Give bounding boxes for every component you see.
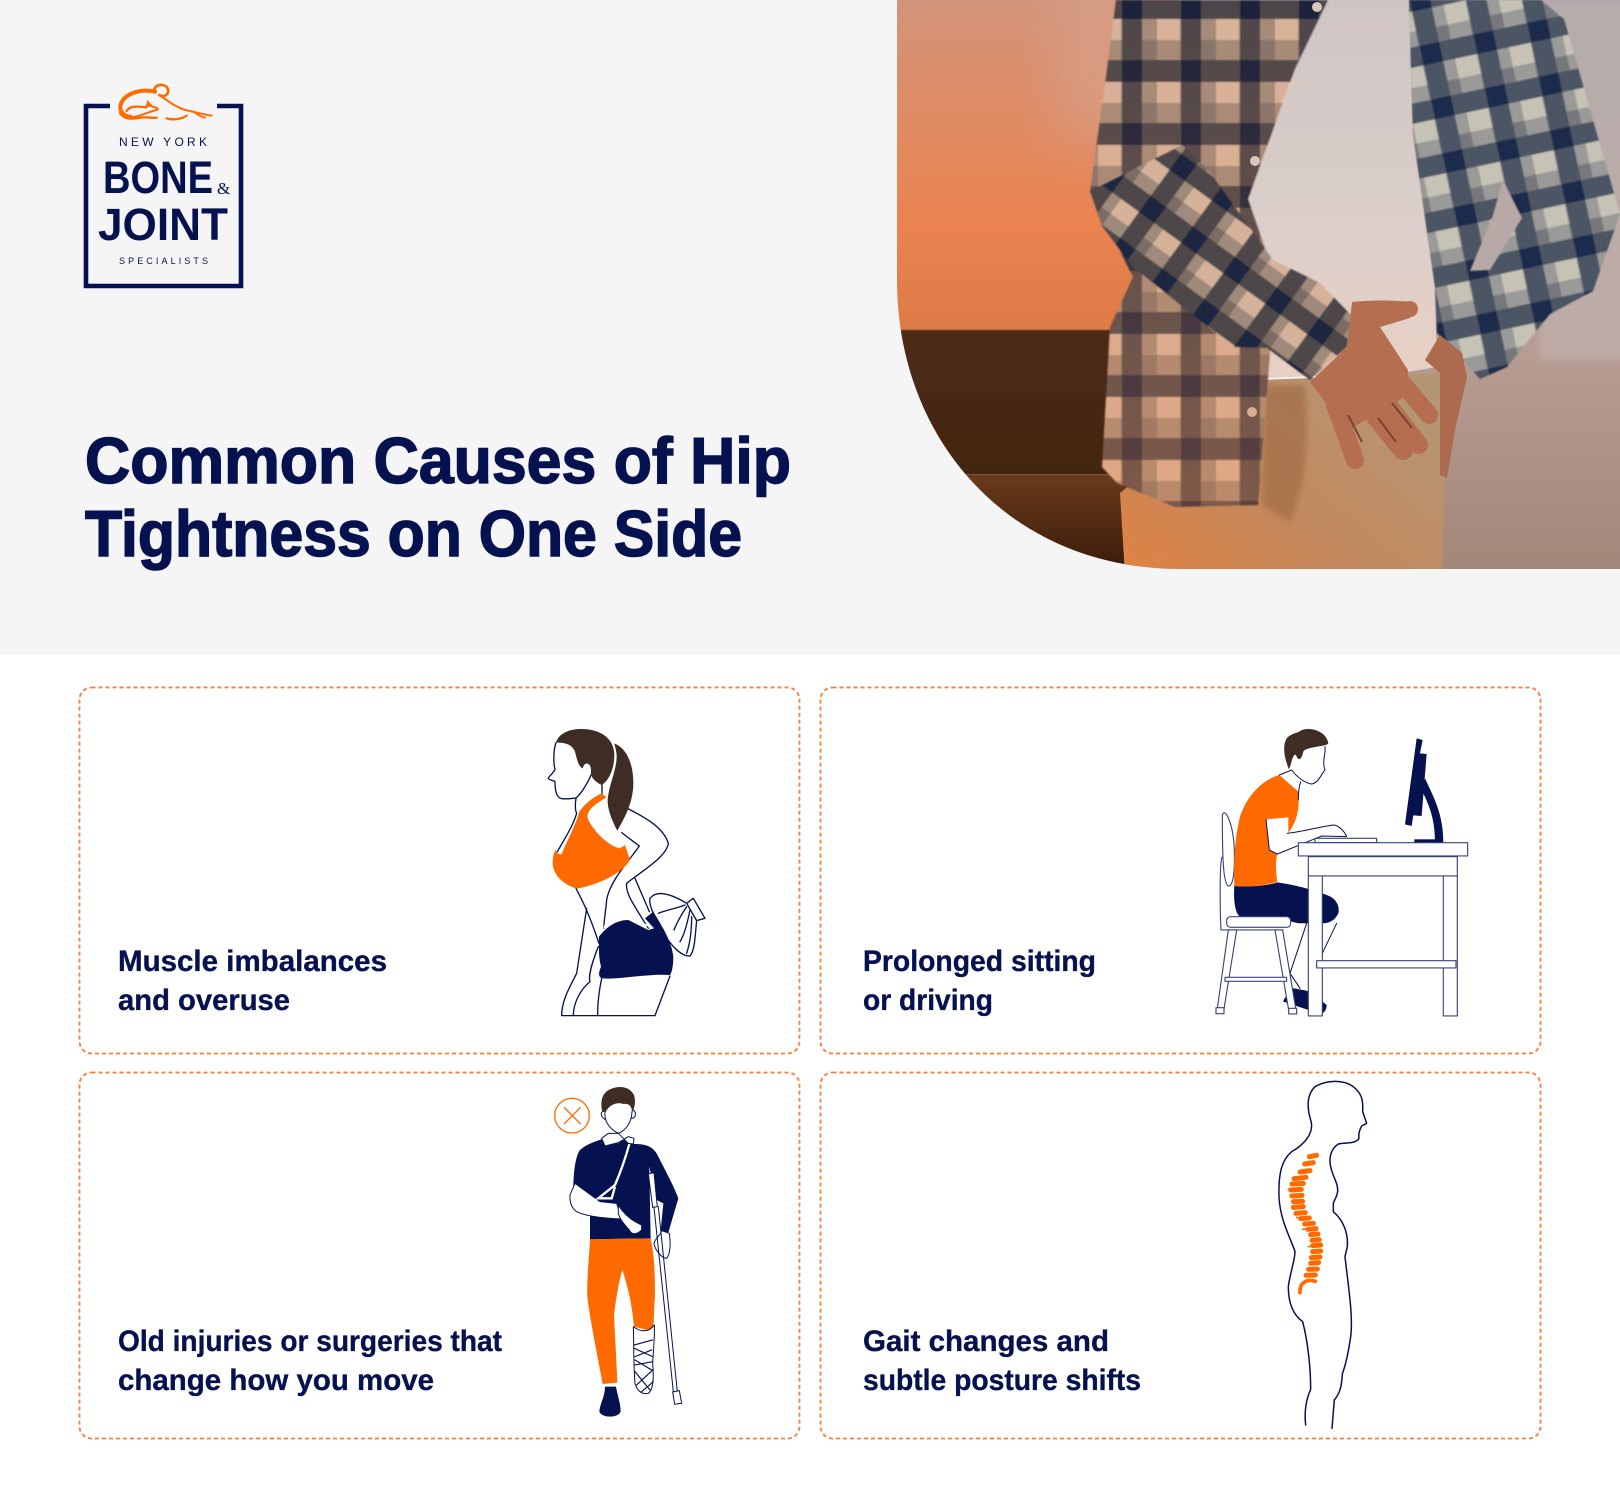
spine vertebrae (1288, 1155, 1321, 1293)
logo text: Bone: BONE (103, 152, 213, 203)
label: prolonged sitting: or driving (863, 984, 993, 1017)
label: muscle imbalances (118, 945, 387, 1017)
logo text: Joint: JOINT (98, 199, 228, 250)
panel: muscle imbalances (80, 688, 800, 1054)
label: gait changes: Gait changes and (863, 1325, 1109, 1358)
label: muscle imbalances: and overuse (118, 984, 290, 1017)
icon: woman holding ice pack on hip (548, 729, 705, 1016)
label: old injuries: Old injuries or surgeries that (118, 1325, 502, 1358)
icon: man with sling, cast and crutch (555, 1087, 682, 1417)
label: old injuries: change how you move (118, 1364, 434, 1397)
logo (86, 85, 241, 286)
logo bracket frame (86, 106, 241, 286)
label: old injuries (118, 1325, 502, 1397)
title: Common Causes of Hip (85, 424, 791, 497)
label: muscle imbalances: Muscle imbalances (118, 945, 387, 978)
title: Tightness on One Side (85, 497, 742, 570)
label: gait changes (863, 1325, 1141, 1397)
label: gait changes: subtle posture shifts (863, 1364, 1141, 1397)
logo text: New York: NEW YORK (119, 135, 207, 149)
header background (0, 0, 1620, 655)
panel: old injuries (80, 1072, 800, 1438)
hero photo: man holding hip (880, 0, 1620, 575)
icon: man sitting at desk (1216, 729, 1468, 1016)
title (85, 424, 791, 570)
icon: body profile with curved spine (1279, 1081, 1367, 1428)
label: prolonged sitting: Prolonged sitting (863, 945, 1096, 978)
panel: gait changes (820, 1072, 1540, 1438)
logo text: ampersand: & (217, 179, 230, 198)
label: prolonged sitting (863, 945, 1096, 1017)
panel: prolonged sitting (820, 688, 1540, 1054)
icon: crossed circle (555, 1098, 589, 1133)
logo figure: reclining person (120, 85, 212, 119)
logo text: Specialists: SPECIALISTS (119, 256, 208, 266)
shirt buttons (1247, 2, 1322, 417)
